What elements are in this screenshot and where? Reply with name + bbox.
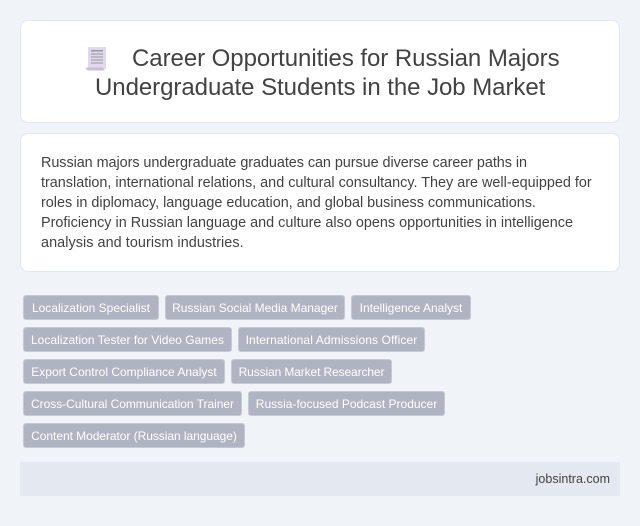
tag: Localization Specialist [32, 301, 150, 315]
tag [23, 295, 159, 320]
tag [23, 359, 225, 384]
text block: description: analysis and tourism industries. [41, 235, 244, 251]
tag [351, 295, 471, 320]
tag [23, 391, 242, 416]
tag [248, 391, 445, 416]
tag: Russian Market Researcher [239, 365, 384, 379]
tag: Content Moderator (Russian language) [31, 429, 237, 443]
tag [231, 359, 392, 384]
text block: description: Russian majors undergraduate graduates can pursue diverse career paths in [41, 155, 527, 171]
tag [23, 327, 232, 352]
text block: description [41, 155, 592, 251]
icon: document scroll [86, 47, 106, 70]
tag: International Admissions Officer [246, 333, 417, 347]
tag: Cross-Cultural Communication Trainer [31, 397, 234, 411]
panel: title card [20, 20, 620, 123]
tag: Russian Social Media Manager [172, 301, 338, 315]
text block: description: translation, international relations, and cultural consultancy. They are well-equipped for [41, 175, 592, 191]
footer bar [20, 462, 620, 496]
tag: Export Control Compliance Analyst [31, 365, 217, 379]
heading: title: Undergraduate Students in the Job Market [95, 74, 545, 101]
panel: description [20, 133, 620, 272]
tag [23, 423, 245, 448]
tag [165, 295, 345, 320]
text block: description: roles in diplomacy, language education, and global business communications. [41, 195, 536, 211]
tag: Russia-focused Podcast Producer [256, 397, 437, 411]
text block: description: Proficiency in Russian language and culture also opens opportunities in intelligence [41, 215, 573, 231]
footer source text: jobsintra.com [536, 472, 610, 486]
tag: Intelligence Analyst [360, 301, 462, 315]
heading: title: Career Opportunities for Russian Majors [132, 45, 560, 72]
tag list: career titles [23, 295, 471, 448]
heading: title [95, 45, 560, 101]
tag: Localization Tester for Video Games [31, 333, 224, 347]
tag [238, 327, 425, 352]
